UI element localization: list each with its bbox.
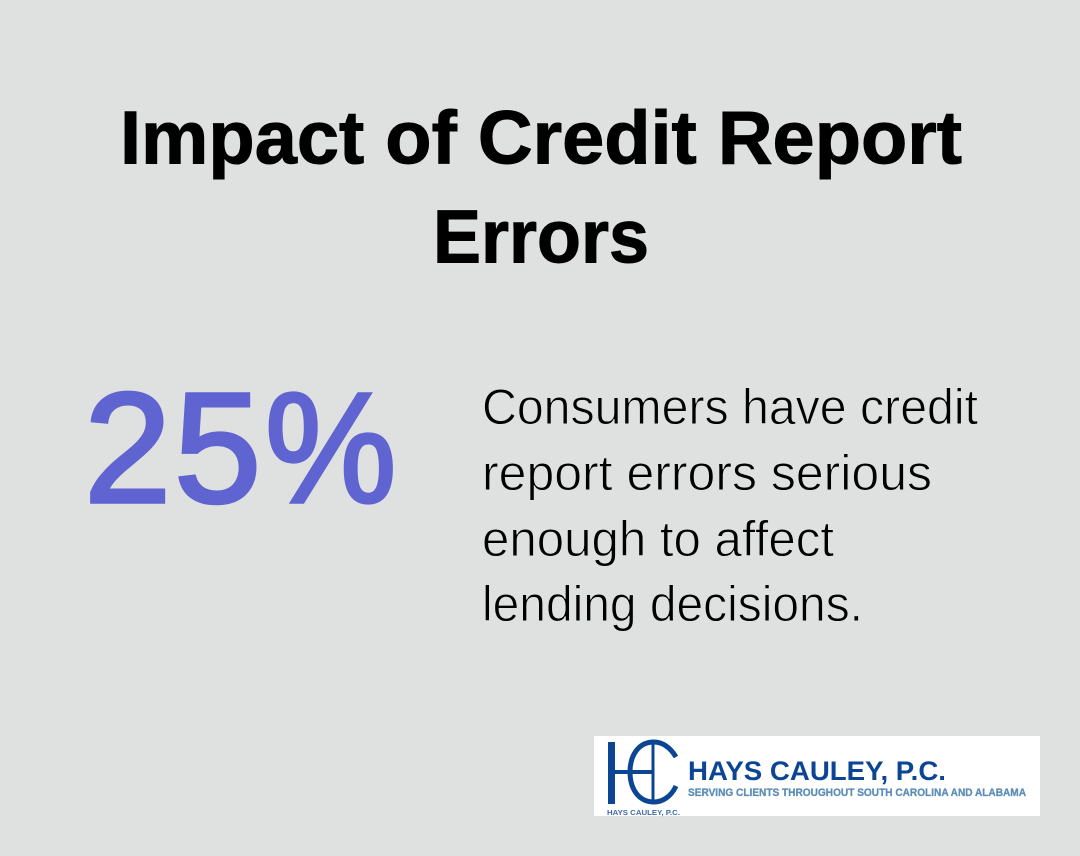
title <box>120 96 962 278</box>
logo: Hays Cauley, P.C. <box>594 736 1040 817</box>
statistic: 25%: 5 <box>174 361 261 536</box>
description text: Consumers have credit <box>482 379 978 435</box>
statistic: 25%: % <box>265 361 396 536</box>
title: Impact of Credit Report <box>120 96 962 180</box>
title: Errors <box>433 194 649 278</box>
description text: report errors serious <box>482 445 932 501</box>
description text: lending decisions. <box>482 576 863 632</box>
logo tagline: SERVING CLIENTS THROUGHOUT SOUTH CAROLINA AND ALABAMA <box>688 787 1026 799</box>
description text: enough to affect <box>482 511 834 567</box>
logo name: HAYS CAULEY, P.C. <box>688 756 946 786</box>
statistic: 25%: 2 <box>84 361 171 536</box>
logo small caption: HAYS CAULEY, P.C. <box>607 808 680 817</box>
description text <box>482 379 978 632</box>
icon: HC monogram <box>612 742 676 804</box>
statistic: 25% <box>84 361 396 536</box>
